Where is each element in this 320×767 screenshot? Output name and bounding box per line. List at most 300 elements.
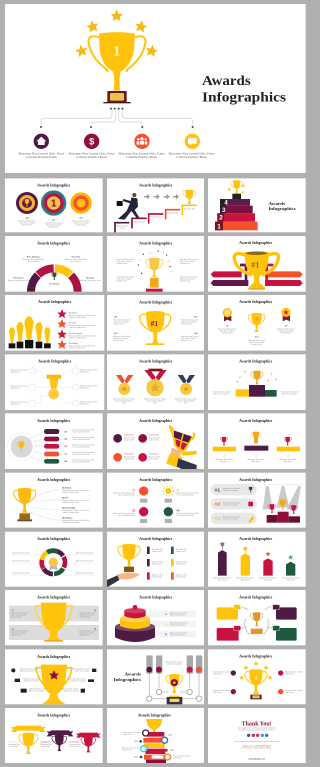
panel: three ribbon trophies: Maecenas Non xyxy=(69,744,81,746)
panel: trophy in palm: Laoreet Odio xyxy=(152,550,162,553)
rows 3 and 4 xyxy=(5,295,306,410)
panel: podium: Maecenas Non Laoreet xyxy=(281,390,299,393)
panel: trophy in palm: Laoreet Odio xyxy=(152,576,162,579)
panel: medallions: Porttitor Purus xyxy=(76,224,86,227)
panel: three ribbon trophies: Lorem Ipsum xyxy=(41,742,51,744)
panel: tube diagram: Infographics xyxy=(114,677,142,682)
panel: three medals: Purus xyxy=(122,402,126,404)
panel: medal with six points: Odio. Fusce xyxy=(11,404,20,406)
panel: gray bands with trophy: Porttitor Purus xyxy=(11,634,22,637)
icon: people xyxy=(134,134,150,149)
panel: statues and stars: Best Actor xyxy=(69,312,78,315)
panel: gray bands with trophy: #4 xyxy=(94,627,97,630)
panel: big trophy ribbons: Awards Infographics xyxy=(239,241,273,245)
panel: bar chart: Maecenas Non Laoreet xyxy=(282,577,300,580)
panel: four balls: #2 xyxy=(177,490,180,492)
caption group: Lobortis Porttitor Purus xyxy=(76,155,108,159)
panel: book stack: Maecenas Non Laoreet xyxy=(123,731,141,734)
panel: trophy with four labels: Odio. Fusce Lobortis xyxy=(181,320,196,323)
caption group xyxy=(18,152,215,159)
panel: statues and stars: Maecenas Non Laoreet Odio. Fusce xyxy=(69,334,96,337)
panel: thank you: Our design team will be happy to help you xyxy=(241,746,272,749)
panel: statues and stars: Lobortis Porttitor Purus xyxy=(69,336,86,339)
panel: three medals: Awards Infographics xyxy=(139,359,173,363)
panel: gray bands with trophy: Odio. Fusce Lobortis xyxy=(79,632,95,635)
panel: trophy with list: Best TV xyxy=(62,497,69,500)
rows 1 and 2 xyxy=(5,178,306,292)
panel: medal and trophy trio: Porttitor Purus xyxy=(222,332,233,335)
panel: medal and trophy trio: 2nd xyxy=(255,337,259,339)
panel: stairs businessman xyxy=(107,178,204,232)
panel: ring with medal: Maecenas Non Laoreet xyxy=(76,571,94,574)
panel: trophy with list: Lobortis Porttitor Purus xyxy=(62,491,79,494)
panel: medal with six points: Maecenas Non Laoreet xyxy=(11,368,28,371)
panel: semicircle gauge: Maecenas Non Laoreet Odio xyxy=(23,258,44,261)
panel: gray bands with trophy: #1 xyxy=(12,610,15,612)
panel: pyramid steps: 3 xyxy=(222,207,226,214)
panel: medal with six points: Maecenas Non Laoreet xyxy=(11,401,28,404)
panel: spotlight podium: Odio. Fusce Lobortis xyxy=(223,518,238,521)
panel: medallions: 1 xyxy=(51,199,57,210)
panel: pills with trophy circle: Fusce Lobortis Porttitor xyxy=(73,438,90,441)
panel: three medals: Purus xyxy=(184,402,188,404)
panel: four balls: #3 xyxy=(132,510,136,512)
panel: trophy in palm: Awards Infographics xyxy=(139,537,173,541)
panel: layered cake: #2 xyxy=(165,624,168,626)
panel: three ribbon trophies: Laoreet Odio xyxy=(9,745,18,748)
panel: trophy in palm: Laoreet Odio xyxy=(176,576,186,579)
panel: three ribbon trophies: Lorem Ipsum xyxy=(9,742,19,744)
panel: thank you xyxy=(208,708,306,763)
panel: three banners: Odio. Fusce xyxy=(252,461,261,463)
panel: star trophy: Maecenas Non Laoreet xyxy=(61,688,79,691)
panel: medal and trophy trio: Porttitor Purus xyxy=(251,343,262,346)
panel: spotlight podium: Maecenas Non Laoreet xyxy=(223,501,240,504)
panel: medallions: Porttitor Purus xyxy=(48,226,59,229)
panel: four balls: #1 xyxy=(132,490,136,492)
panel: pills with trophy circle: #04 xyxy=(64,453,67,456)
panel: trophy with four labels: #01 xyxy=(114,316,118,318)
panel: bar chart: Maecenas Non Laoreet xyxy=(259,577,277,580)
panel: semicircle gauge: In Progress xyxy=(13,277,25,280)
panel: semicircle gauge: Best Strategy xyxy=(27,256,41,259)
panel: book stack: Odio. Fusce xyxy=(122,749,131,751)
panel: pyramid steps: 4 xyxy=(224,201,228,207)
panel: trophy with confetti: Odio. Fusce Lobortis xyxy=(180,260,195,263)
panel: trophy with confetti: Awards Infographics xyxy=(139,242,173,246)
panel: stairs businessman: Maecenas Non xyxy=(184,208,195,210)
panel: hand holding trophy: Awards Infographics xyxy=(139,419,173,423)
icon: chat xyxy=(185,134,200,149)
panel: semicircle gauge: Awards Infographics xyxy=(37,242,71,246)
panel: stairs businessman: Awards Infographics xyxy=(139,184,173,188)
panel: hand holding trophy: Laoreet Odio xyxy=(124,439,134,442)
panel: book stack: 2019 xyxy=(134,741,138,743)
caption group: Maecenas Non Laoreet Odio. Fusce xyxy=(69,152,115,156)
panel: medal with six points: Awards Infographics xyxy=(38,359,72,363)
panel: three ribbon trophies: Laoreet Odio xyxy=(41,745,50,748)
panel: stairs businessman: Maecenas Non xyxy=(167,212,178,214)
panel: statues and stars: Maecenas Non Laoreet Odio. Fusce xyxy=(69,314,96,317)
panel: medal and trophy trio: 1st xyxy=(226,325,229,328)
panel: stairs businessman: Maecenas Non xyxy=(134,221,145,223)
panel: spotlight podium: Odio. Fusce Lobortis xyxy=(223,503,238,506)
panel: medallions: Maecenas Non Laoreet xyxy=(18,220,36,223)
panel: star trophy: Maecenas Non Laoreet xyxy=(69,678,87,681)
panel: semicircle gauge: Maecenas Non Laoreet Odio xyxy=(65,258,86,261)
panel: four balls: Maecenas Non Laoreet Odio. xyxy=(113,512,136,515)
panel: three banners: #3 xyxy=(287,456,290,458)
panel: pills with trophy circle: Maecenas Non Laoreet Odio xyxy=(73,443,94,446)
panel: medal with six points: Maecenas Non Laoreet xyxy=(80,385,98,388)
panel: hand holding trophy: Lorem Ipsum xyxy=(124,454,134,456)
panel: stairs businessman: Maecenas Non xyxy=(150,217,162,219)
panel: layered cake: Odio. Fusce Lobortis xyxy=(170,613,185,616)
panel: semicircle gauge: Maecenas Non Laoreet Odio xyxy=(8,279,29,282)
panel: pyramid steps: 2 xyxy=(219,215,223,222)
panel: bar chart: Odio. Fusce xyxy=(286,580,295,582)
panel: pills with trophy circle: Maecenas Non Laoreet Odio xyxy=(73,429,94,432)
panel: four balls: Maecenas Non Laoreet Odio. xyxy=(177,492,199,495)
panel: spotlight podium: Maecenas Non Laoreet xyxy=(223,516,240,519)
panel: book stack: 2021 xyxy=(134,757,138,759)
panel: trophy with confetti: Maecenas Non Laoreet xyxy=(180,258,198,261)
panel: spotlight podium: #1 xyxy=(215,487,220,493)
panel: hand holding trophy: Lorem Ipsum xyxy=(149,454,159,456)
title: Awards xyxy=(202,74,251,89)
panel: trophy with four circles: Maecenas Non Laoreet xyxy=(213,689,231,692)
panel: stairs businessman: Maecenas Non xyxy=(116,226,128,228)
panel: semicircle gauge: Fusce Lobortis xyxy=(70,260,81,263)
panel: pills with trophy circle: Fusce Lobortis Porttitor xyxy=(73,431,90,434)
panel: statues and stars: Lobortis Porttitor Purus xyxy=(69,316,86,319)
panel: trophy with four labels: #1 xyxy=(151,319,158,328)
panel: trophy with list xyxy=(5,473,103,528)
caption group: Maecenas Non Laoreet Odio. Fusce xyxy=(169,152,215,156)
panel: statues and stars: Best Film xyxy=(69,322,77,325)
rows 7 and 8 xyxy=(5,532,306,645)
panel: medal with six points: Odio. Fusce xyxy=(11,388,20,390)
panel: spotlight podium: #2 xyxy=(215,502,220,508)
panel: ring with medal: Maecenas Non Laoreet xyxy=(76,560,94,563)
panel: medallions: Odio. Fusce Lobortis xyxy=(46,224,61,227)
panel: trophy with list: Maecenas Non Laoreet Odio. Fusce xyxy=(62,509,89,512)
panel: thank you: For more Infographic templates, please visit our website page xyxy=(234,740,279,743)
panel: statues and stars xyxy=(5,295,104,351)
panel: trophy with four labels: Maecenas Non Laoreet xyxy=(113,318,131,321)
panel: trophy with four labels: Porttitor Purus xyxy=(113,339,124,342)
panel: medallions: #01 xyxy=(52,219,56,221)
panel: trophy in palm: Maecenas Non xyxy=(176,561,187,563)
panel: spotlight podium: Odio. Fusce Lobortis xyxy=(223,489,238,492)
panel: pills with trophy circle: Maecenas Non Laoreet Odio xyxy=(73,458,94,461)
panel: tube diagram: Awards xyxy=(124,672,142,677)
panel: pills with trophy circle: Awards Infographics xyxy=(37,419,71,423)
panel: trophy with four circles: Odio. Fusce xyxy=(213,692,222,694)
panel: medallions xyxy=(5,178,103,232)
panel: three medals: Fusce Lobortis Porttitor xyxy=(177,399,195,402)
panel: spotlight podium xyxy=(208,473,306,528)
panel: four balls: #4 xyxy=(177,509,180,512)
panel: trophy with four labels: Porttitor Purus xyxy=(181,322,192,325)
panel: hand holding trophy: Maecenas Non xyxy=(149,457,160,459)
panel: medal and trophy trio: Maecenas Non Laoreet xyxy=(248,339,266,342)
panel: podium: Odio. Fusce Lobortis xyxy=(281,392,297,395)
icon: main trophy: 1 xyxy=(113,44,120,60)
panel: trophy with list: Maecenas Non Laoreet Odio. Fusce xyxy=(62,499,89,502)
panel: statues and stars: Best Screenplay xyxy=(69,332,82,335)
caption group: Maecenas Non Laoreet Odio. Fusce xyxy=(18,152,65,156)
panel: statues and stars: Maecenas Non Laoreet Odio. Fusce xyxy=(69,344,96,347)
panel: bar chart xyxy=(208,532,306,587)
panel: star trophy: Odio. Fusce Lobortis xyxy=(23,680,39,683)
panel: layered cake: #3 xyxy=(165,634,168,636)
panel: trophy with confetti: Maecenas Non Laoreet xyxy=(117,258,134,261)
title: Infographics xyxy=(202,91,287,106)
panel: star trophy: Odio. Fusce Lobortis xyxy=(29,690,44,693)
panel: four balls: Fusce Lobortis Porttitor xyxy=(177,494,194,497)
panel: gray bands with trophy: Porttitor Purus xyxy=(11,615,22,618)
panel: three banners: #2 xyxy=(255,456,258,458)
panel: medal with six points: Odio. Fusce xyxy=(11,371,20,373)
panel: book stack: Awards Infographics xyxy=(138,713,171,717)
panel: star trophy: Maecenas Non Laoreet xyxy=(73,668,91,671)
panel: four balls: Maecenas Non Laoreet Odio. xyxy=(113,492,136,495)
panel: semicircle gauge: Maecenas Non Laoreet Odio xyxy=(79,279,101,282)
panel: hand holding trophy: Lorem Ipsum xyxy=(124,435,134,437)
panel: three ribbon trophies xyxy=(5,708,103,763)
icon: home xyxy=(34,134,49,149)
panel: star trophy: Maecenas Non Laoreet xyxy=(20,668,38,671)
panel: bar chart: Maecenas Non Laoreet xyxy=(237,577,254,580)
panel: three banners: Maecenas Non Laoreet xyxy=(216,458,233,461)
panel: medal with six points: Odio. Fusce xyxy=(80,371,89,373)
panel: pills with trophy circle: Fusce Lobortis Porttitor xyxy=(73,445,90,448)
panel: trophy with four circles: Odio. Fusce xyxy=(285,692,294,694)
panel: trophy with confetti xyxy=(107,236,204,292)
panel: gray bands with trophy: Maecenas Non Laoreet xyxy=(11,611,29,614)
panel: spotlight podium: #3 xyxy=(215,516,220,522)
panel: four callouts xyxy=(208,590,306,645)
panel: trophy with confetti: Porttitor Purus xyxy=(180,280,191,283)
panel: thank you: www.slidegeeks.com xyxy=(248,758,265,760)
panel: trophy with confetti: Odio. Fusce Lobortis xyxy=(117,260,132,263)
panel: medal and trophy trio: 3rd xyxy=(284,325,288,328)
panel: trophy with list: Maecenas Non Laoreet Odio. Fusce xyxy=(62,519,89,522)
panel: medallions: Odio. Fusce Lobortis xyxy=(73,222,89,225)
panel: trophy in palm: Laoreet Odio xyxy=(152,562,162,565)
panel: podium xyxy=(208,354,306,410)
panel: trophy with list: Best Screenplay xyxy=(62,507,75,510)
panel: gray bands with trophy: Maecenas Non Laoreet xyxy=(79,611,97,614)
panel: trophy in palm: Maecenas Non xyxy=(152,575,163,577)
panel: three medals: Maecenas Non Laoreet Odio. xyxy=(113,397,135,400)
panel: thank you: Contact us for a custom design request xyxy=(242,744,272,747)
panel: pills with trophy circle: #01 xyxy=(64,431,67,433)
panel: three medals: Fusce Lobortis Porttitor xyxy=(146,399,164,402)
panel: trophy in palm: Maecenas Non xyxy=(152,549,163,551)
panel: tube diagram: Maecenas Non Laoreet xyxy=(166,661,183,664)
panel: ring with medal: Maecenas Non Laoreet xyxy=(76,551,94,554)
panel: stairs businessman: Laoreet xyxy=(119,227,125,230)
panel: three medals: Fusce Lobortis Porttitor xyxy=(115,399,133,402)
panel: pyramid steps: Infographics xyxy=(268,206,296,211)
panel: medal with six points: Maecenas Non Laoreet xyxy=(80,401,98,404)
panel: semicircle gauge: The Award xyxy=(49,282,60,285)
panel: gray bands with trophy: #3 xyxy=(12,628,15,630)
panel: trophy with four labels: #03 xyxy=(114,333,118,335)
panel: medallions: Odio. Fusce Lobortis xyxy=(19,222,35,225)
panel: three banners: #1 xyxy=(223,456,226,458)
panel: gray bands with trophy: Porttitor Purus xyxy=(79,634,90,637)
panel: trophy with four labels: #02 xyxy=(194,316,198,318)
panel: pills with trophy circle: Maecenas Non Laoreet Odio xyxy=(73,451,94,454)
panel: pills with trophy circle: #05 xyxy=(64,461,67,463)
panel: podium: Odio. Fusce Lobortis xyxy=(213,392,229,395)
caption group: Lobortis Porttitor Purus xyxy=(126,155,158,159)
panel: layered cake: Odio. Fusce Lobortis xyxy=(170,623,185,626)
panel: statues and stars: Lobortis Porttitor Purus xyxy=(69,326,86,329)
panel: trophy in palm: Maecenas Non xyxy=(152,561,163,563)
caption group: Lobortis Porttitor Purus xyxy=(26,155,58,159)
panel: semicircle gauge xyxy=(5,236,103,292)
panel: star trophy: Odio. Fusce Lobortis xyxy=(75,670,90,673)
panel: trophy in palm: Maecenas Non xyxy=(176,575,187,577)
panel: medallions: Porttitor Purus xyxy=(22,224,32,227)
panel: bar chart: Odio. Fusce xyxy=(264,580,273,582)
panel: three banners: Maecenas Non Laoreet xyxy=(279,458,297,461)
panel: star trophy: Odio. Fusce Lobortis xyxy=(71,680,86,683)
panel: pills with trophy circle: #03 xyxy=(64,446,67,448)
panel: thank you: Thank You! xyxy=(242,720,272,727)
panel: thank you: this slide and your presentation, please reach out xyxy=(239,729,275,732)
panel: trophy with four circles: Maecenas Non Laoreet xyxy=(285,670,303,673)
panel: book stack: Maecenas Non Laoreet xyxy=(173,754,191,757)
panel: ring with medal: Maecenas Non Laoreet xyxy=(13,571,30,574)
panel: medallions: Maecenas Non Laoreet xyxy=(45,222,63,225)
title xyxy=(202,74,287,106)
panel: star trophy xyxy=(5,649,103,704)
panel: layered cake: Maecenas Non Laoreet xyxy=(170,621,188,624)
panel: trophy with list: Lobortis Porttitor Purus xyxy=(62,521,79,524)
panel: layered cake xyxy=(107,590,204,645)
panel: pills with trophy circle: Fusce Lobortis Porttitor xyxy=(73,460,90,463)
panel: thank you: Our support is here whenever you need a help with xyxy=(238,726,275,729)
panel: three banners: Awards Infographics xyxy=(239,419,273,423)
panel: hand holding trophy: Laoreet Odio xyxy=(124,458,134,461)
panel: medallions: #03 xyxy=(79,218,84,220)
panel: trophy with four labels: Maecenas Non Laoreet xyxy=(181,335,199,338)
panel: four balls: Maecenas Non Laoreet Odio. xyxy=(177,512,199,515)
panel: four balls: Fusce Lobortis Porttitor xyxy=(177,514,194,517)
panel: trophy in palm: Laoreet Odio xyxy=(176,550,186,553)
panel: statues and stars: Awards Infographics xyxy=(38,300,72,304)
panel: pyramid steps: Awards xyxy=(268,201,286,206)
icon: dollar xyxy=(84,134,99,149)
icon: dollar: $ xyxy=(89,137,95,147)
panel: three medals: Maecenas Non Laoreet Odio. xyxy=(144,397,166,400)
panel: trophy with list: Awards Infographics xyxy=(37,478,71,482)
panel: spotlight podium: Maecenas Non Laoreet xyxy=(223,487,240,490)
panel: book stack: 2020 xyxy=(170,750,174,752)
panel: ring with medal: Maecenas Non Laoreet xyxy=(13,551,30,554)
panel: semicircle gauge: The Goal xyxy=(71,257,80,259)
panel: pills with trophy circle: Maecenas Non Laoreet Odio xyxy=(73,436,94,439)
panel: hand holding trophy: Maecenas Non xyxy=(124,438,135,440)
panel: medal and trophy trio: Maecenas Non Laoreet xyxy=(277,328,295,331)
panel: pills with trophy circle: Fusce Lobortis Porttitor xyxy=(73,453,90,456)
panel: layered cake: Awards Infographics xyxy=(139,595,173,599)
icon: main trophy xyxy=(89,32,145,103)
panel: medal and trophy trio: Odio. Fusce Lobortis xyxy=(220,330,235,333)
panel: gray bands with trophy: Odio. Fusce Lobortis xyxy=(79,613,95,616)
panel: book stack: Maecenas Non Laoreet xyxy=(122,746,140,749)
panel: bar chart: Maecenas Non Laoreet xyxy=(214,577,231,580)
panel: star trophy: Odio. Fusce Lobortis xyxy=(63,690,79,693)
panel: three ribbon trophies: Lorem Ipsum xyxy=(69,742,80,744)
panel: trophy with four labels xyxy=(107,295,204,351)
panel: statues and stars: Best Acting xyxy=(69,342,78,345)
panel: four balls xyxy=(107,473,204,528)
panel: star trophy: Maecenas Non Laoreet xyxy=(29,688,47,691)
panel: medal with six points: Odio. Fusce xyxy=(80,404,89,406)
panel: trophy with confetti: Maecenas Non Laoreet xyxy=(180,276,198,279)
panel: trophy in palm xyxy=(107,532,204,587)
panel: three banners: Odio. Fusce xyxy=(220,461,229,463)
rows 5 and 6 xyxy=(5,413,306,528)
panel: trophy with confetti: Odio. Fusce Lobortis xyxy=(117,278,132,281)
panel: pyramid steps: 1 xyxy=(217,223,221,230)
panel: three medals: Maecenas Non Laoreet Odio. xyxy=(175,397,197,400)
panel: medallions: #02 xyxy=(25,218,30,220)
panel: book stack: Odio. Fusce xyxy=(173,757,182,759)
panel: trophy with four labels: #04 xyxy=(194,332,198,335)
panel: medal with six points xyxy=(5,354,104,410)
panel: book stack: Odio. Fusce xyxy=(123,734,132,736)
panel: trophy with four labels: Porttitor Purus xyxy=(113,322,124,325)
panel: trophy with confetti: Odio. Fusce Lobortis xyxy=(180,278,195,281)
panel: statues and stars: Lobortis Porttitor Purus xyxy=(69,346,86,349)
panel: four balls: Fusce Lobortis Porttitor xyxy=(118,514,135,517)
panel: gray bands with trophy: Maecenas Non Laoreet xyxy=(79,630,97,633)
panel: three banners xyxy=(208,413,306,469)
panel: pills with trophy circle: #02 xyxy=(64,439,67,441)
panel: medal and trophy trio: Odio. Fusce Lobortis xyxy=(278,330,294,333)
panel: medal and trophy trio xyxy=(208,295,306,351)
panel: statues and stars: Maecenas Non Laoreet Odio. Fusce xyxy=(69,324,96,327)
panel: hand holding trophy: Laoreet Odio xyxy=(149,439,159,442)
panel: trophy with four labels: Maecenas Non Laoreet xyxy=(113,335,131,338)
panel: three medals: Purus xyxy=(153,402,157,404)
caption group: Maecenas Non Laoreet Odio. Fusce xyxy=(119,152,165,156)
panel: medal with six points: Maecenas Non Laoreet xyxy=(80,368,98,371)
panel: gray bands with trophy: Odio. Fusce Lobortis xyxy=(11,613,26,616)
panel: trophy with confetti: Porttitor Purus xyxy=(117,262,127,265)
panel: hero slide xyxy=(5,4,306,173)
panel: ring with medal xyxy=(5,532,103,587)
panel: star trophy: Maecenas Non Laoreet xyxy=(23,678,41,681)
panel: gray bands with trophy xyxy=(5,590,103,645)
panel: ring with medal: Maecenas Non Laoreet xyxy=(13,560,30,563)
panel: medal and trophy trio: Porttitor Purus xyxy=(281,332,291,335)
panel: trophy with four circles: Odio. Fusce xyxy=(213,673,222,675)
panel: star trophy: Odio. Fusce Lobortis xyxy=(20,670,35,673)
panel: gray bands with trophy: Maecenas Non Laoreet xyxy=(11,630,29,633)
panel: trophy with list: Lobortis Porttitor Purus xyxy=(62,501,79,504)
caption group: Lobortis Porttitor Purus xyxy=(176,155,208,159)
panel: big trophy ribbons xyxy=(208,236,306,292)
panel: podium: Maecenas Non Laoreet xyxy=(213,390,231,393)
